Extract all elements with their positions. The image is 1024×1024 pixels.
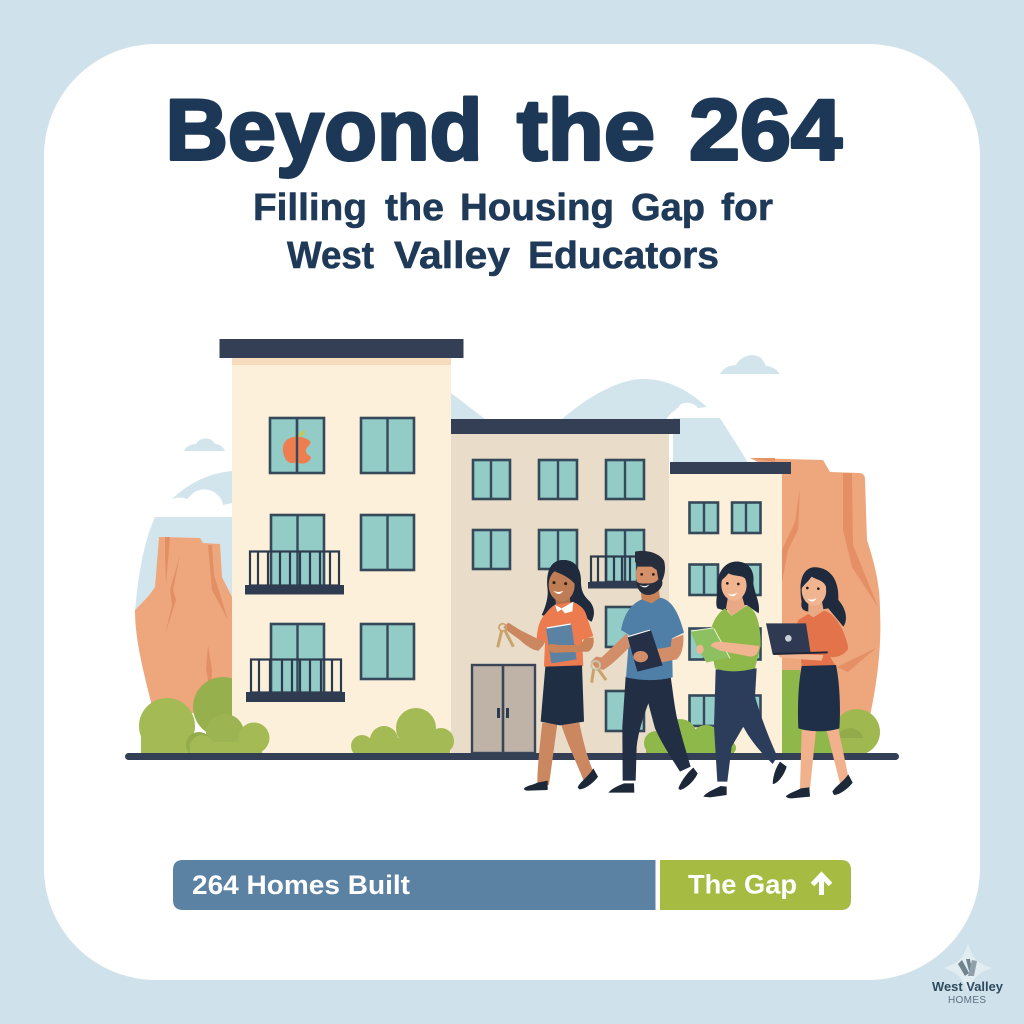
subtitle: Housing xyxy=(460,187,614,229)
right red rock mesa xyxy=(750,458,880,740)
subtitle xyxy=(253,187,773,277)
logo: West Valley Homes: HOMES xyxy=(948,995,986,1006)
bush centre-right xyxy=(644,719,736,755)
building: tall left block xyxy=(220,339,464,753)
icon: up arrow xyxy=(812,875,830,895)
bush right xyxy=(834,709,880,756)
people group xyxy=(498,551,853,798)
roof xyxy=(451,419,680,434)
subtitle: Gap xyxy=(631,187,705,229)
person: man with book xyxy=(591,551,698,793)
windows xyxy=(690,502,760,726)
logo: West Valley Homes: West Valley xyxy=(932,979,1004,994)
subtitle: West xyxy=(287,235,374,277)
bush centre-left xyxy=(351,708,454,757)
title xyxy=(166,82,842,178)
title: 264 xyxy=(689,82,842,178)
sky hills right xyxy=(451,379,749,464)
title: the xyxy=(517,82,655,178)
roof xyxy=(670,462,791,474)
logo: West Valley Homes xyxy=(932,943,1004,1006)
bar segment: 264 homes built: 264 Homes Built xyxy=(192,870,410,900)
bar segment: 264 homes built xyxy=(173,860,656,910)
windows xyxy=(473,460,644,731)
keys xyxy=(498,624,513,647)
person: woman with green folder xyxy=(691,562,787,797)
bush left xyxy=(139,698,270,759)
clouds xyxy=(184,355,780,451)
bushes xyxy=(139,698,880,759)
roof xyxy=(220,339,464,358)
subtitle: the xyxy=(385,187,444,229)
person: woman with laptop xyxy=(766,567,853,798)
title: Beyond xyxy=(166,82,482,178)
bush behind left building xyxy=(193,677,253,737)
bar segment: the gap xyxy=(660,860,851,910)
icon: logo star mark xyxy=(943,943,992,992)
building: middle block xyxy=(451,419,680,753)
progress bar: homes built and the gap xyxy=(173,860,851,910)
subtitle: for xyxy=(721,187,773,229)
balcony upper xyxy=(245,551,344,594)
left red rock mesa xyxy=(135,537,232,720)
balcony xyxy=(588,556,640,588)
entrance door xyxy=(472,665,535,753)
illustration: background landscape xyxy=(135,355,880,753)
bar segment: the gap: The Gap xyxy=(688,870,797,900)
ground line xyxy=(125,753,899,760)
green area beside right building xyxy=(782,670,845,753)
subtitle: Valley xyxy=(394,235,510,277)
balcony lower xyxy=(246,659,345,702)
sky hills left xyxy=(135,471,232,612)
keys xyxy=(591,661,606,683)
building: right block xyxy=(669,462,791,753)
subtitle: Filling xyxy=(253,187,367,229)
subtitle: Educators xyxy=(528,235,719,277)
person: woman with keys and book xyxy=(498,560,598,791)
windows xyxy=(270,418,414,694)
icon: apple in window xyxy=(283,418,311,473)
